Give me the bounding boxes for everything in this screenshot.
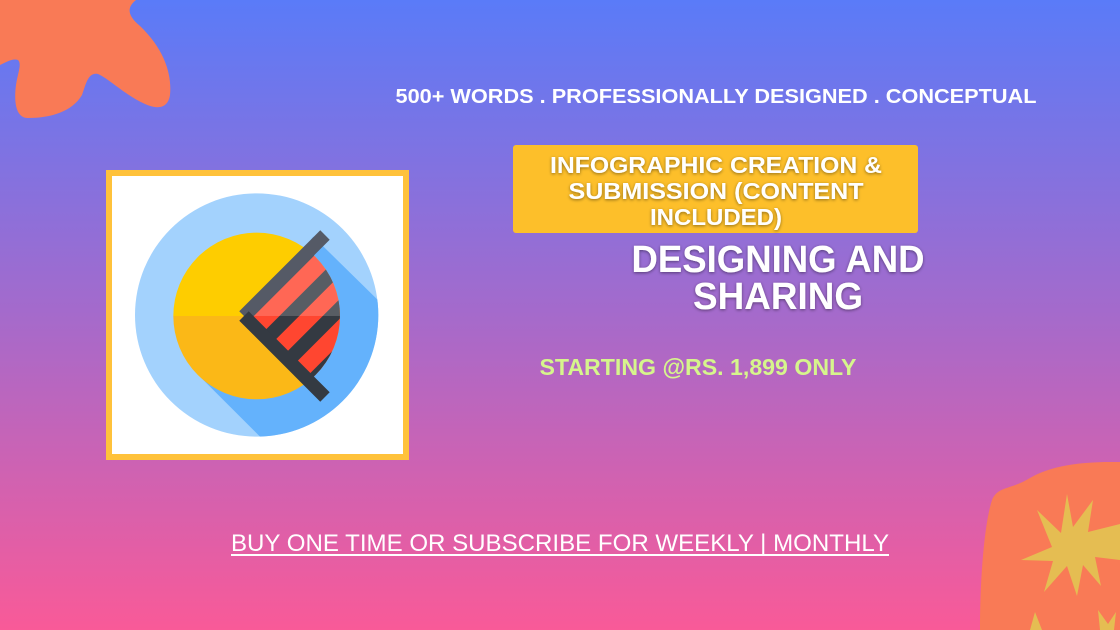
text: top tagline: 500+ WORDS . PROFESSIONALLY DESIGNED . CONCEPTUAL xyxy=(396,86,1036,108)
callout: yellow title box: SUBMISSION (CONTENT xyxy=(568,178,864,204)
callout: yellow title box: INFOGRAPHIC CREATION & xyxy=(550,152,882,178)
text: price: STARTING @RS. 1,899 ONLY xyxy=(540,354,856,380)
blob: bottom-right with star xyxy=(980,462,1120,630)
heading: designing and sharing: SHARING xyxy=(693,276,863,318)
icon: star xyxy=(1021,494,1120,596)
panel: icon frame xyxy=(106,170,409,460)
heading: designing and sharing: DESIGNING AND xyxy=(632,239,924,281)
icon: pie chart xyxy=(135,193,378,437)
text: subscription link: BUY ONE TIME OR SUBSCRIBE FOR WEEKLY | MONTHLY xyxy=(231,530,889,557)
blob: top-left xyxy=(0,0,170,118)
callout: yellow title box: INCLUDED) xyxy=(650,204,782,230)
heading: designing and sharing xyxy=(632,239,924,318)
callout: yellow title box xyxy=(513,145,918,233)
